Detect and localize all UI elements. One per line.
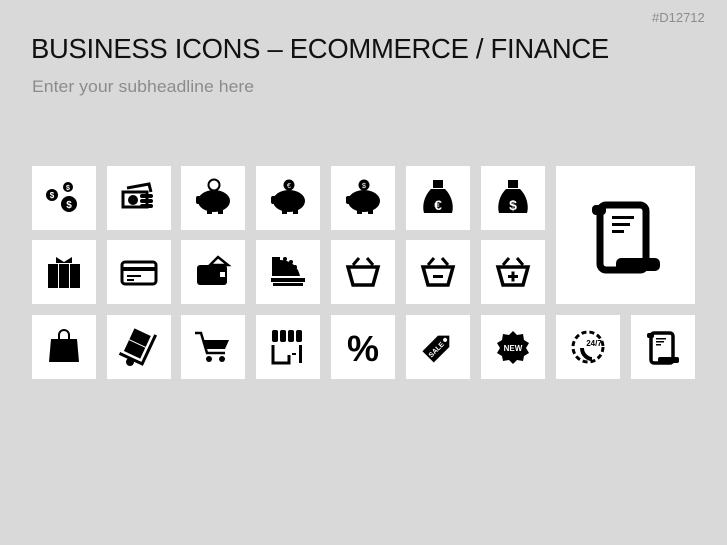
icon: piggy bank dollar: $ [362,183,366,190]
icon: piggy bank euro [271,180,305,214]
icon: money bag dollar [498,180,528,213]
icon: receipt small [647,333,679,363]
icon: new badge [497,331,529,364]
icon: gift [48,257,80,288]
icon: coins: $ [66,200,72,211]
icon: coins [46,182,77,212]
icon: money bag euro [423,180,453,213]
subheadline: Enter your subheadline here [32,77,254,96]
icon: sale tag: SALE [428,341,446,359]
icon: shopping cart [195,333,229,362]
icon: hand truck [119,324,156,366]
icon: money bag dollar: $ [509,197,517,213]
icon: basket plus [498,258,528,285]
icon: coins: $ [66,185,70,192]
icon: receipt large [592,205,660,271]
icon: shopping bag [49,330,79,362]
icon: piggy bank [196,180,230,214]
icon: coins: $ [50,191,55,200]
icon: piggy bank euro: € [287,183,291,190]
icon: cash register bell [271,257,305,286]
icon: wallet [197,257,228,285]
icon: basket minus [423,258,453,285]
icon: cash [123,184,153,208]
icon: credit card [122,262,156,284]
icon: percent: % [347,328,379,369]
icon: 24/7 support [573,332,603,362]
icon: shop [272,330,302,363]
code label: #D12712 [652,10,705,25]
icon: piggy bank dollar [346,180,380,214]
icon: sale tag [422,330,455,363]
icon: 24/7 support: 24/7 [586,339,602,348]
icon: money bag euro: € [434,197,442,213]
icon: new badge: NEW [504,344,523,353]
title: BUSINESS ICONS – ECOMMERCE / FINANCE [31,33,609,64]
icon: basket empty [348,258,378,285]
